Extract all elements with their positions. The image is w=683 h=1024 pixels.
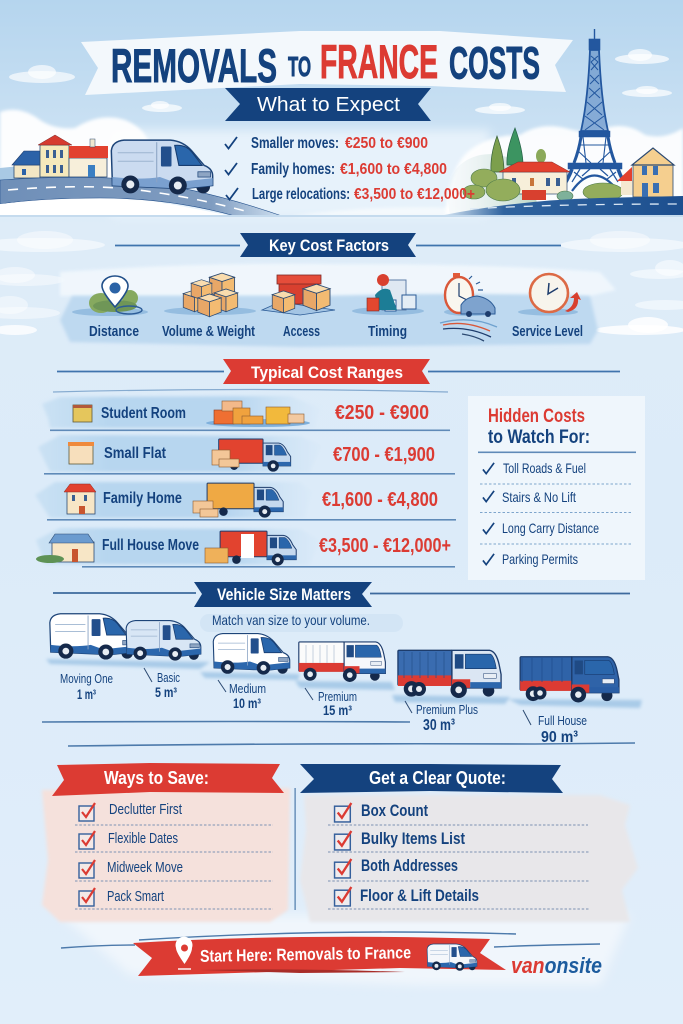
icon: speed lines: [440, 320, 497, 341]
logo: vanonsite: vanonsite: [511, 953, 602, 978]
icon: access: [262, 275, 335, 315]
vehicle labels: 10 m³: [233, 695, 261, 711]
item: large relocations: €3,500 to €12,000+: [354, 186, 475, 203]
item: smaller moves: [225, 135, 428, 152]
checklist: Bulky Items List: [361, 829, 465, 848]
tall cream house: [38, 135, 72, 177]
row: full house move: [36, 528, 455, 568]
item: family homes: Family homes:: [251, 161, 335, 178]
item: smaller moves: €250 to €900: [345, 135, 428, 152]
panel: clear quote: [300, 764, 638, 922]
panel: key cost factors: [60, 264, 616, 347]
title text: FRANCE: [320, 35, 438, 88]
ribbon heading: [52, 763, 284, 796]
checklist: [79, 801, 183, 906]
tagline: Match van size to your volume.: [212, 612, 370, 628]
vehicle labels: Medium: [229, 681, 266, 696]
checklist: Both Addresses: [361, 856, 458, 875]
labels: Service Level: [512, 323, 583, 340]
heading ribbon: Vehicle Size Matters: [194, 582, 372, 607]
trees: [491, 128, 546, 172]
vehicle: Full House: [520, 657, 619, 702]
checklist: Box Count: [361, 801, 428, 820]
row: family home: [35, 482, 456, 521]
panel heading: Hidden Costs: [488, 406, 585, 427]
chart: typical cost ranges: [35, 390, 456, 568]
heading ribbon: Key Cost Factors: Key Cost Factors: [269, 236, 389, 255]
section divider lines: key cost factors: [115, 244, 561, 246]
bushes: [463, 169, 623, 201]
labels: Timing: [368, 323, 407, 340]
call to action text: Start Here: Removals to France: [200, 943, 411, 966]
panel divider: [294, 788, 296, 910]
vehicle: Basic: [126, 621, 201, 661]
row: full house move: €3,500 - €12,000+: [319, 535, 451, 557]
labels: Access: [283, 323, 320, 340]
panel heading: to Watch For:: [488, 427, 590, 448]
heading ribbon: Typical Cost Ranges: Typical Cost Ranges: [251, 363, 403, 382]
vehicle: Premium: [299, 642, 385, 682]
subtitle ribbon: What to Expect: What to Expect: [257, 94, 400, 116]
vehicle labels: [60, 670, 587, 746]
row: small flat: Small Flat: [104, 445, 167, 462]
village house: [499, 162, 570, 200]
Eiffel Tower: [560, 29, 629, 191]
scene: left village with van on road: [0, 110, 282, 216]
vehicle labels: 15 m³: [323, 702, 352, 718]
labels: Volume & Weight: [162, 323, 255, 340]
hidden cost items: Toll Roads & Fuel: [503, 460, 586, 476]
road markings: [8, 187, 245, 211]
vehicle labels: 1 m³: [77, 686, 96, 702]
vehicle labels: 30 m³: [423, 717, 455, 734]
cost summary list: [225, 135, 475, 203]
row: student room: [42, 396, 450, 431]
section divider lines: typical cost ranges: [57, 370, 620, 372]
vehicle labels: Premium Plus: [416, 702, 478, 717]
panel: ways to save: [42, 763, 290, 922]
row: family home: €1,600 - €4,800: [322, 489, 438, 511]
white swoosh under road: [0, 199, 232, 216]
title text: [111, 35, 540, 92]
road dashes: [470, 204, 683, 209]
icon: stacked boxes: [164, 273, 256, 317]
icon: van: [427, 944, 477, 971]
icon: distance pin: [72, 276, 148, 316]
heading ribbon: Typical Cost Ranges: [223, 359, 430, 384]
checklist: Declutter First: [109, 801, 183, 818]
item: large relocations: Large relocations:: [252, 186, 350, 203]
hidden cost items: Stairs & No Lift: [502, 489, 576, 505]
item: large relocations: [226, 186, 475, 203]
section divider lines: vehicle size: [53, 592, 630, 594]
leader ticks: [144, 668, 531, 725]
vehicle labels: 5 m³: [155, 684, 177, 700]
checklist: Flexible Dates: [108, 830, 178, 847]
panel heading: [488, 406, 590, 448]
scene: right hills, Eiffel Tower and houses: [444, 29, 683, 217]
subtitle ribbon: What to Expect: [225, 88, 431, 121]
vehicle labels: Premium: [318, 689, 357, 704]
ribbon heading: Ways to Save:: [104, 768, 209, 788]
labels: [89, 323, 583, 340]
heading ribbon: Vehicle Size Matters: Vehicle Size Matters: [217, 585, 351, 604]
title text: COSTS: [449, 38, 540, 88]
icon: location pin: [176, 937, 192, 969]
vehicle: Premium Plus: [398, 650, 501, 698]
checklist: [335, 801, 479, 906]
title banner: [81, 31, 573, 95]
big van: [111, 140, 213, 194]
hidden cost items: Parking Permits: [502, 551, 578, 567]
row: student room: €250 - €900: [335, 402, 429, 424]
row: student room: Student Room: [101, 405, 186, 422]
blue-roof house: [12, 151, 40, 178]
row: full house move: Full House Move: [102, 537, 199, 554]
ribbon heading: [300, 764, 563, 793]
checklist: Floor & Lift Details: [360, 886, 479, 905]
title text: REMOVALS: [111, 39, 277, 92]
call to action ribbon: [133, 937, 506, 976]
item: family homes: [225, 161, 447, 178]
row: small flat: €700 - €1,900: [333, 444, 435, 466]
road: [0, 177, 282, 216]
hidden cost items: Long Carry Distance: [502, 520, 599, 536]
icon: stopwatch and car: [444, 273, 496, 317]
icon: service clock: [518, 274, 581, 316]
item: smaller moves: Smaller moves:: [251, 135, 339, 152]
item: family homes: €1,600 to €4,800: [340, 161, 447, 178]
background clouds: [0, 49, 683, 335]
checklist: Midweek Move: [107, 859, 183, 876]
section rules: [42, 722, 635, 746]
icon: timing person: [352, 274, 424, 315]
pale haze behind hero list: [110, 130, 490, 218]
vehicle labels: Moving One: [60, 671, 113, 686]
vehicle: Moving One: [50, 614, 135, 660]
chart: vehicle size: [46, 612, 642, 746]
vehicle shadows: [46, 659, 642, 708]
row: family home: Family Home: [103, 490, 182, 507]
vehicle: Medium: [213, 634, 290, 675]
title text: TO: [288, 51, 311, 82]
vehicle labels: 90 m³: [541, 729, 578, 746]
heading ribbon: Key Cost Factors: [240, 233, 416, 257]
labels: Distance: [89, 323, 139, 340]
white glow behind call to action: [60, 915, 630, 985]
hidden cost items: [483, 460, 599, 567]
red-roof white house: [69, 139, 108, 177]
ribbon heading: Get a Clear Quote:: [369, 768, 506, 788]
white swoosh under hero list: [290, 207, 470, 216]
right-hand houses: [617, 148, 674, 197]
vehicle labels: Full House: [538, 713, 587, 728]
row: small flat: [38, 435, 455, 475]
accent lines around call to action: [61, 932, 600, 948]
panel: hidden costs: [468, 396, 645, 580]
checklist: Pack Smart: [107, 888, 165, 905]
horizon line: [0, 215, 683, 217]
road: [444, 196, 683, 217]
vehicle labels: Basic: [157, 670, 180, 685]
